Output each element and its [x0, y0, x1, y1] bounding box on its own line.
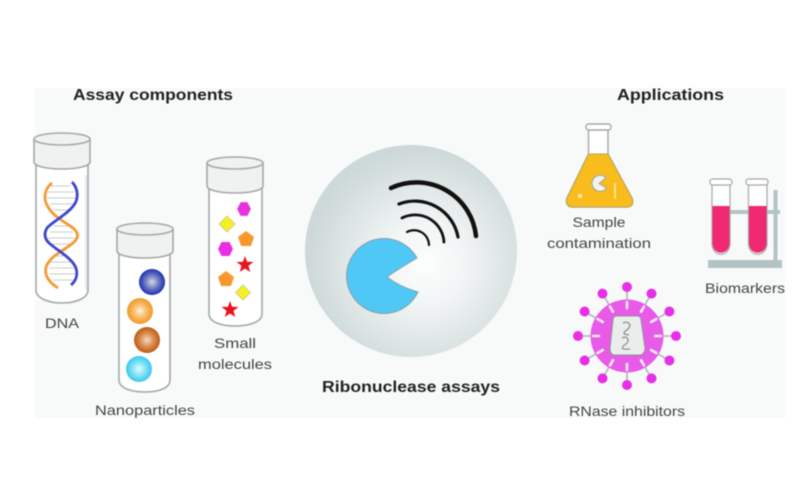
label: DNA: DNA	[45, 315, 80, 331]
icon: flask	[566, 124, 633, 207]
icon: RNase inhibitor virus	[573, 282, 681, 390]
nanoparticle: blue	[139, 269, 165, 295]
central disc: ribonuclease	[305, 145, 517, 357]
label: Ribonuclease assays: Ribonuclease assays	[322, 379, 500, 396]
icon: pacman enzyme	[347, 238, 418, 313]
nanoparticle: brown	[134, 327, 160, 353]
icon: signal arcs	[391, 182, 476, 245]
label: Nanoparticles: Nanoparticles	[95, 402, 195, 418]
label: RNase inhibitors: RNase inhibitors	[569, 403, 685, 419]
tube: Small molecules	[207, 157, 263, 326]
nanoparticle: cyan	[126, 356, 152, 382]
label: Small molecules: Small	[214, 335, 256, 351]
diamond	[236, 285, 250, 300]
heading: Applications: Applications	[617, 87, 724, 104]
diamond	[219, 216, 235, 232]
icon: test tubes on rack	[708, 179, 782, 268]
tube: DNA	[34, 133, 90, 303]
star	[236, 256, 254, 272]
star	[222, 301, 238, 317]
label: Sample contamination	[547, 214, 651, 251]
label: Small molecules: molecules	[198, 356, 272, 372]
background panel	[35, 88, 785, 418]
pentagon	[218, 271, 234, 286]
hexagon	[237, 202, 251, 216]
label: Sample contamination: contamination	[547, 235, 651, 251]
label: Biomarkers: Biomarkers	[705, 280, 785, 296]
tube: Nanoparticles	[117, 223, 173, 392]
pentagon	[238, 231, 254, 246]
label: Small molecules	[198, 335, 272, 372]
label: Sample contamination: Sample	[572, 214, 626, 230]
heading: Assay components: Assay components	[73, 87, 233, 104]
nanoparticle: orange	[127, 298, 153, 324]
hexagon	[218, 242, 233, 256]
